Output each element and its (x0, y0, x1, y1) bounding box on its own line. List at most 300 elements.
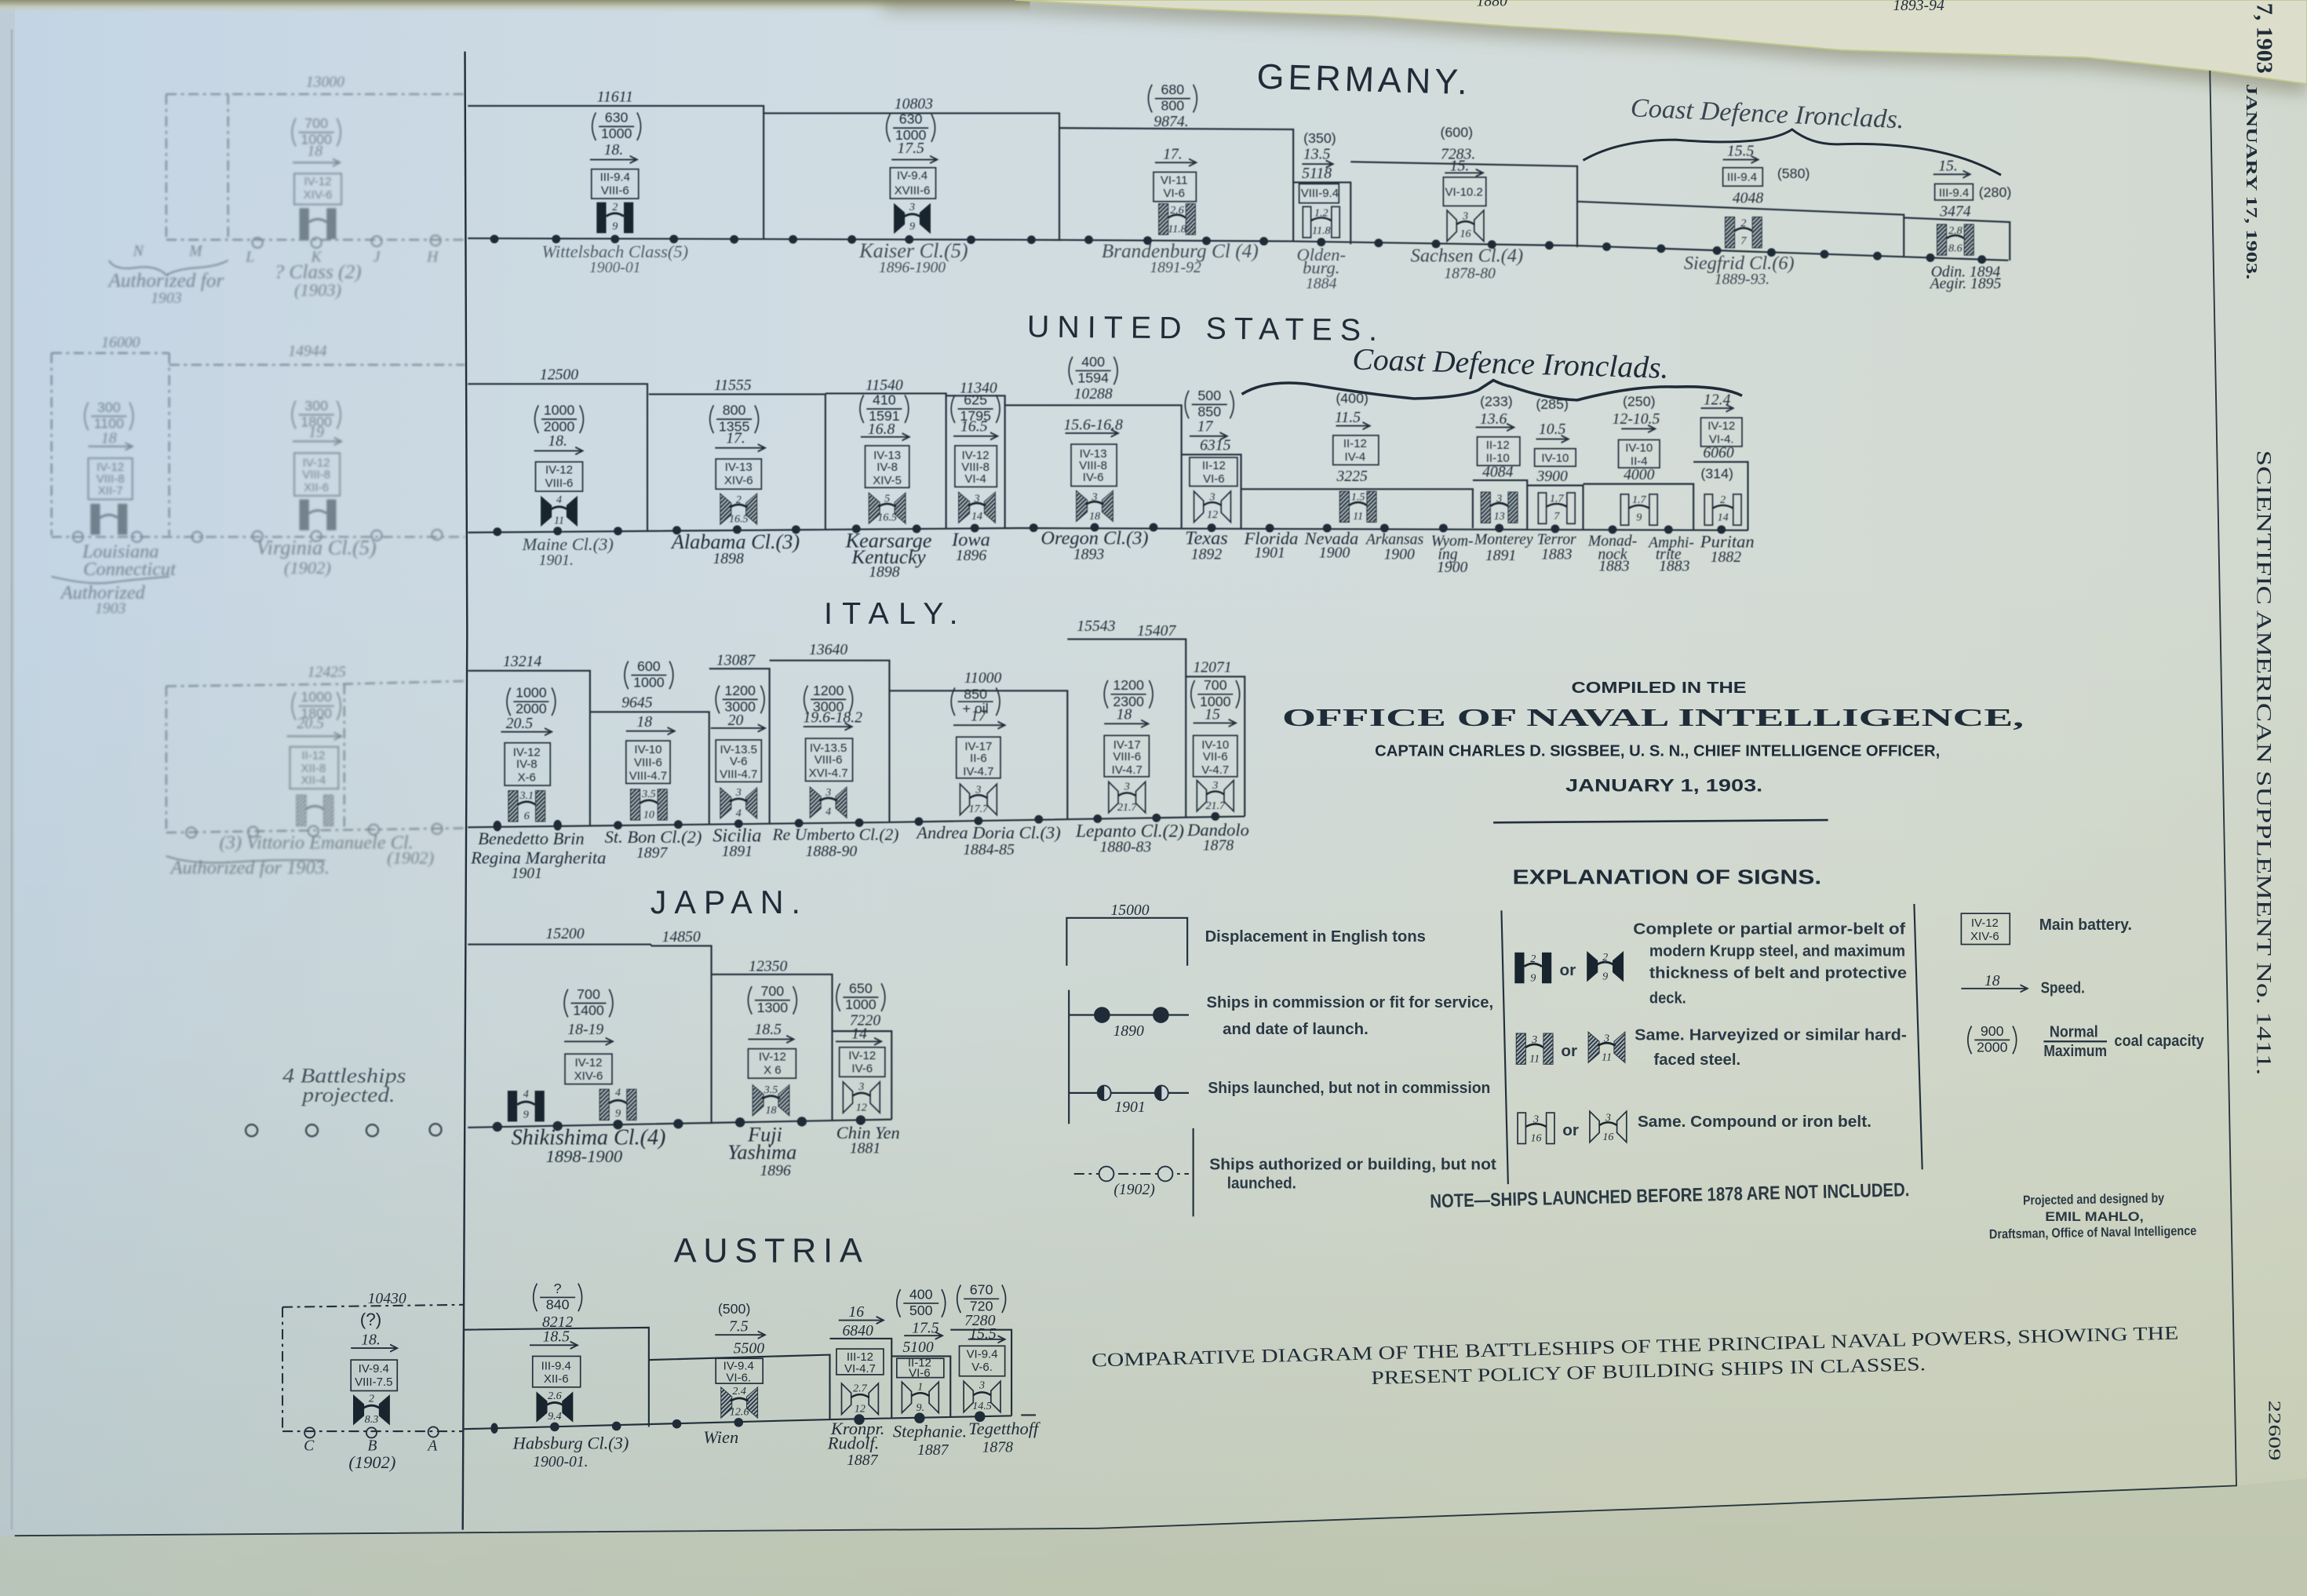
ship: Lepanto (1075, 618, 1184, 855)
ships: Monadnock and Amphitrite: (250) (1623, 393, 1656, 409)
ship: Iowa (951, 380, 1000, 564)
sign: ships in commission: Ships in commission or fit for service, (1206, 993, 1493, 1011)
japan ship dots (493, 1115, 866, 1131)
japan projected ships: 4 Battleships (282, 1065, 406, 1088)
ship: Oldenburg: (350) (1303, 130, 1336, 146)
sign: coal capacity: coal capacity (2114, 1032, 2204, 1050)
ship: Stephanie: 400 (909, 1286, 933, 1302)
ship: Dandolo: 700 (1204, 677, 1227, 693)
ship: St. Bon: 9645 (621, 694, 653, 712)
germany building ships (ghost): M (188, 242, 203, 260)
ship: Fuji and Yashima: 18.5 (755, 1021, 782, 1038)
heading: Austria: AUSTRIA (674, 1232, 862, 1270)
ship: Stephanie: 9. (917, 1401, 924, 1414)
Austria chart (282, 1281, 1041, 1472)
ship: Texas: VI-6 (1203, 472, 1225, 486)
us displacement outline (468, 384, 1748, 533)
ship: Monterey: 13 (1494, 510, 1505, 523)
Germany chart (107, 74, 2011, 307)
ship: Kronprinz Rudolf (827, 1303, 884, 1469)
United States chart (52, 333, 1755, 618)
ship: Oregon: IV-13 (1080, 447, 1107, 461)
us building ships (ghost): Connecticut (83, 559, 177, 580)
Japan chart (246, 925, 900, 1179)
ship: Terror: 10.5 (1539, 421, 1565, 438)
ships: Florida class monitors (1244, 391, 1474, 576)
sign: Harveyized armor: faced steel. (1653, 1051, 1740, 1069)
ship: Texas: Texas (1185, 528, 1228, 549)
ship: Lepanto: 15543 (1077, 618, 1116, 635)
sign: Harveyized armor: 11 (1602, 1051, 1612, 1064)
ship: St. Bon: VIII-4.7 (629, 770, 667, 783)
sign: compound armor: 16 (1530, 1132, 1542, 1145)
ship: Kaiser: 17.5 (897, 140, 924, 157)
ship: Oregon (1041, 354, 1149, 563)
ship: Oldenburg: 11.8 (1312, 224, 1331, 237)
brace: US coast defence ironclads: Coast Defence Ironclads. (1352, 342, 1669, 385)
ship: Re Umberto: 1200 (813, 683, 844, 698)
ship: Oldenburg: VIII-9.4 (1301, 187, 1339, 200)
ship: Terror: 3900 (1536, 468, 1568, 485)
sign: speed: 18 (1984, 972, 2000, 989)
sign: displacement: 15000 (1110, 902, 1150, 919)
us building ships (ghost): 18 (101, 429, 117, 446)
ship: Benedetto Brin: 3.1 (519, 789, 534, 802)
austria building ships: VIII-7.5 (355, 1376, 392, 1389)
ships: Florida class monitors: 1900 (1437, 559, 1467, 576)
ship: Texas: 850 (1197, 404, 1221, 420)
ship: Kaiser: 1000 (895, 127, 927, 143)
austria building ships: 18. (361, 1331, 381, 1348)
sign: compound armor: or (1562, 1121, 1579, 1139)
ship: Sicilia: 4 (736, 807, 742, 819)
ship: Sicilia: 1891 (722, 843, 753, 860)
ship: Maine: Maine Cl.(3) (522, 534, 614, 554)
heading: Germany: GERMANY. (1256, 56, 1467, 102)
ship: Sachsen: 15. (1450, 157, 1469, 174)
sign: coal capacity: Maximum (2043, 1042, 2107, 1060)
ships: Florida class monitors: 1901 (1254, 544, 1285, 561)
italy building ships (ghost): (3) Vittorio Emanuele Cl. (220, 833, 414, 854)
ships: Florida class monitors: Arkansas (1365, 531, 1423, 548)
ship: Shikishima (508, 925, 701, 1166)
japan displacement outline (468, 945, 891, 1128)
ship: Oregon: 18 (1089, 510, 1100, 523)
ship: Fuji and Yashima: 1300 (757, 1000, 788, 1015)
ship: Oldenburg: burg. (1303, 258, 1339, 278)
title block: Office of Naval Intelligence (1282, 679, 2024, 822)
ship: Chin Yen: Chin Yen (836, 1123, 900, 1142)
italy building ships (ghost): 12425 (308, 663, 346, 680)
italy building ships (ghost): 1800 (301, 705, 332, 721)
ship: Benedetto Brin: 1000 (516, 685, 547, 701)
ship: Stephanie (893, 1286, 967, 1459)
germany displacement outline (468, 106, 2010, 261)
ship: Wittelsbach: 630 (605, 110, 629, 126)
ship: Dandolo: 3 (1212, 779, 1218, 792)
ship: Lepanto: 15407 (1137, 622, 1177, 639)
sign: Krupp armor: 9 (1530, 971, 1536, 984)
ship: Alabama: XIV-6 (724, 474, 753, 487)
ships: Monadnock and Amphitrite: trite (1656, 545, 1682, 563)
ship: Monterey: 1891 (1485, 547, 1516, 564)
ship: Maine: 4 (556, 494, 562, 506)
ship: Habsburg: ? (554, 1281, 562, 1296)
ship: Puritan: 6060 (1703, 444, 1734, 461)
ship: Wittelsbach: 11611 (597, 88, 633, 105)
ship: Oldenburg: 5118 (1302, 165, 1332, 182)
sign: ships authorized: (1902) (1113, 1181, 1155, 1198)
ship: Brandenburg: 1891-92 (1150, 259, 1201, 276)
ship: Kearsarge and Kentucky: 410 (873, 392, 896, 408)
sign: ships authorized: launched. (1227, 1175, 1296, 1193)
ship: Habsburg: 9.4 (548, 1410, 562, 1423)
ship: Wien: Wien (703, 1427, 738, 1447)
germany building ships (ghost): H (426, 249, 439, 266)
main vertical axis (463, 52, 467, 1530)
ship: Kearsarge and Kentucky: 5 (884, 492, 890, 505)
ship: Puritan: 14 (1718, 512, 1729, 524)
us building ships (ghost): IV-12 (97, 461, 124, 474)
ship: Puritan (1700, 392, 1755, 566)
us building ships (ghost): IV-12 (303, 456, 330, 469)
ship: Kearsarge and Kentucky: Kentucky (851, 546, 926, 568)
ship: Andrea Doria: 17 (971, 708, 987, 725)
ship: Sicilia: V-6 (730, 755, 748, 768)
ship: Habsburg (512, 1281, 629, 1470)
ship: Texas: 6315 (1200, 437, 1231, 454)
ship: Maine: IV-12 (545, 464, 573, 477)
ship: Texas: 3 (1208, 490, 1215, 503)
ship: Monterey: 3 (1496, 492, 1502, 505)
ship: Oregon: Oregon Cl.(3) (1041, 528, 1149, 549)
italy building ships (ghost): 20.5 (297, 715, 324, 732)
ships: Monadnock and Amphitrite: II-4 (1631, 454, 1648, 468)
sign: compound armor: 16 (1602, 1131, 1613, 1143)
sign: main battery (1961, 913, 2132, 945)
ship: Odin and Aegir: (280) (1979, 184, 2011, 200)
ship: Texas: 1892 (1191, 545, 1222, 563)
ship: Tegetthoff: 720 (970, 1298, 993, 1314)
ship: Puritan: Puritan (1700, 531, 1755, 551)
brace: Germany coast defence ironclads: Coast Defence Ironclads. (1630, 93, 1904, 134)
japan projected ships: projected. (301, 1084, 395, 1106)
ship: Oregon: 1594 (1077, 370, 1109, 385)
ship: Kearsarge and Kentucky: Kearsarge (845, 529, 932, 552)
ship: Tegetthoff: VI-9.4 (967, 1347, 998, 1361)
ship: Siegfrid: 4048 (1733, 190, 1763, 207)
credit: Emil Mahlo: Projected and designed by (2023, 1190, 2165, 1208)
credit: Emil Mahlo (1989, 1190, 2196, 1241)
ship: Chin Yen: 7220 (850, 1012, 880, 1029)
ship: Terror: (285) (1536, 396, 1569, 412)
ship: Dandolo: 1000 (1200, 694, 1231, 709)
ships: Monadnock and Amphitrite: Monad- (1587, 532, 1637, 549)
austria displacement outline (464, 1328, 1011, 1429)
sign: ships launched: 1901 (1114, 1099, 1146, 1116)
ship: Texas: II-12 (1202, 459, 1226, 472)
ship: Maine: 1901. (539, 552, 574, 569)
ships: Monadnock and Amphitrite: 12-10.5 (1613, 410, 1660, 428)
sign: Krupp armor: 2 (1530, 953, 1536, 965)
ship: Andrea Doria: + oil (963, 701, 989, 716)
ship: Lepanto: IV-17 (1113, 738, 1141, 752)
ship: Texas: 17 (1197, 417, 1214, 435)
ship: Oregon: VIII-8 (1079, 459, 1107, 472)
ships: Florida class monitors: IV-4 (1345, 450, 1365, 464)
ship: Tegetthoff: 3 (979, 1379, 985, 1392)
ship: Kronprinz Rudolf: Kronpr. (830, 1419, 884, 1438)
ship: St. Bon: 3.5 (641, 788, 656, 800)
ship: Brandenburg: 680 (1161, 82, 1184, 97)
ship: Terror (1535, 396, 1576, 563)
sign: compound armor (1518, 1111, 1871, 1145)
ship: Texas (1185, 388, 1237, 563)
ship: Alabama: Alabama Cl.(3) (670, 530, 800, 553)
ship: Kronprinz Rudolf: VI-4.7 (844, 1362, 876, 1376)
ship: Brandenburg: 11.8 (1168, 223, 1186, 235)
ship: Wien: 7.5 (729, 1318, 749, 1335)
ship: Brandenburg: Brandenburg Cl (4) (1102, 240, 1259, 262)
ship: Siegfrid: 1889-93. (1715, 271, 1769, 288)
us building ships (ghost): Authorized (60, 582, 146, 603)
margin text: volume header (2243, 3, 2284, 1461)
germany building ships (ghost): J (374, 249, 381, 266)
note: ships before 1878: NOTE—SHIPS LAUNCHED BEFORE 1878 ARE NOT INCLUDED. (1430, 1179, 1910, 1212)
ship: Re Umberto (772, 641, 898, 860)
ship: Chin Yen: 3 (858, 1080, 864, 1093)
ship: Puritan: (314) (1700, 465, 1733, 481)
ships: Florida class monitors: 11.5 (1335, 409, 1361, 426)
ship: Alabama: 2 (736, 494, 742, 506)
ship: Kaiser: 1896-1900 (879, 259, 946, 276)
ship: Maine: 12500 (540, 366, 578, 384)
ship: Fuji and Yashima: IV-12 (759, 1051, 786, 1064)
sign: ships launched (1069, 1079, 1490, 1116)
ship: Kearsarge and Kentucky: XIV-5 (873, 474, 902, 487)
margin text: volume header: 22609 (2265, 1401, 2284, 1461)
sign: main battery: Main battery. (2039, 916, 2132, 934)
ship: Oldenburg: 1884 (1306, 275, 1337, 292)
ship: Kearsarge and Kentucky: 11540 (866, 377, 903, 394)
italy displacement outline (468, 639, 1245, 827)
italy building ships (ghost) (166, 663, 465, 879)
ship: Dandolo: 21.7 (1205, 800, 1226, 812)
ship: St. Bon: 600 (637, 658, 661, 674)
ships: Monadnock and Amphitrite: 1883 (1659, 557, 1690, 574)
ships: Florida class monitors: 11 (1353, 510, 1363, 523)
germany building ships (ghost): 13000 (306, 74, 344, 91)
ship: Tegetthoff: 670 (970, 1282, 993, 1298)
ship: Brandenburg: 9874. (1154, 113, 1189, 130)
ship: Shikishima: 4 (615, 1087, 621, 1099)
germany building ships (ghost): K (311, 249, 323, 266)
ship: Wien: 12.6 (730, 1405, 749, 1418)
us building ships (ghost): 14944 (288, 343, 327, 360)
ship: Wittelsbach: Wittelsbach Class(5) (541, 242, 688, 261)
germany building ships (ghost): 18 (307, 143, 323, 160)
ship: Odin and Aegir: 8.6 (1948, 242, 1963, 255)
ship: Iowa: 3 (973, 492, 980, 505)
ship: Fuji and Yashima (727, 957, 796, 1179)
ship: Fuji and Yashima: 12350 (749, 957, 788, 975)
ship: Sicilia: 1200 (724, 683, 756, 698)
us building ships (ghost): XII-6 (304, 481, 329, 494)
ship: Sicilia: VIII-4.7 (720, 768, 757, 782)
ship: Andrea Doria: IV-4.7 (963, 765, 993, 778)
ship: Maine (522, 366, 614, 569)
ship: Iowa: 16.5 (960, 417, 988, 435)
sign: Harveyized armor: 11 (1529, 1053, 1540, 1066)
ship: Brandenburg: VI-11 (1161, 173, 1188, 187)
ships: Monadnock and Amphitrite: 4000 (1624, 466, 1655, 483)
ship: Iowa: 14 (971, 510, 982, 523)
ship: Lepanto: Lepanto Cl.(2) (1075, 822, 1184, 842)
ship: Kaiser: 10803 (895, 96, 933, 113)
ship: Kearsarge and Kentucky: 16.8 (868, 421, 895, 438)
germany building ships (ghost): Authorized for (107, 270, 224, 292)
ship: Sachsen: 1878-80 (1444, 264, 1496, 282)
ship: Andrea Doria: Andrea Doria Cl.(3) (915, 823, 1061, 843)
ship: Shikishima: 14850 (662, 928, 701, 946)
ship: Wittelsbach: 1900-01 (589, 259, 641, 276)
ship: Siegfrid: 7 (1740, 235, 1747, 247)
ship: Wittelsbach: III-9.4 (600, 171, 630, 184)
ship: St. Bon: IV-10 (634, 743, 661, 756)
ship: Wien: (500) (718, 1301, 750, 1317)
us building ships (ghost): Louisiana (82, 541, 159, 562)
ship: Kaiser: XVIII-6 (895, 184, 930, 197)
ship: Stephanie: 5100 (902, 1339, 934, 1356)
us building ships (ghost): 300 (304, 398, 328, 414)
ship: Shikishima: 1898-1900 (546, 1146, 622, 1166)
sign: coal capacity: Normal (2050, 1023, 2098, 1041)
ship: Stephanie: 17.5 (912, 1319, 939, 1336)
ship: Lepanto: 3 (1124, 781, 1130, 793)
ship: Re Umberto: 13640 (809, 641, 847, 658)
us ship dots (493, 523, 1726, 536)
caption: comparative diagram (1092, 1323, 2179, 1389)
ship: Odin and Aegir: 2.8 (1948, 224, 1963, 237)
ship: Benedetto Brin: 20.5 (506, 715, 533, 732)
title block: Office of Naval Intelligence: OFFICE OF NAVAL INTELLIGENCE, (1282, 704, 2024, 731)
ship: Oregon: 10288 (1074, 385, 1113, 403)
sign: Krupp armor: Complete or partial armor-belt of (1633, 920, 1905, 938)
ship: Odin and Aegir: 15. (1938, 157, 1958, 174)
sign: compound armor: Same. Compound or iron belt. (1638, 1113, 1871, 1131)
ship: Brandenburg: 2.6 (1170, 204, 1184, 217)
ship: Habsburg: XII-6 (544, 1372, 569, 1386)
heading: United States: UNITED STATES. (1027, 309, 1377, 348)
ship: Alabama: IV-13 (725, 461, 753, 474)
ship: Benedetto Brin: 1901 (512, 865, 542, 882)
ships: Monadnock and Amphitrite: 9 (1636, 512, 1642, 524)
austria building ships: 8.3 (365, 1413, 378, 1426)
ship: Wittelsbach (541, 88, 688, 276)
overlapping top page (883, 0, 2307, 94)
japan projected ships (246, 1065, 441, 1136)
sign: main battery: IV-12 (1971, 916, 1999, 930)
ship: Re Umberto: XVI-4.7 (809, 767, 848, 780)
ship: Iowa: 11340 (960, 380, 997, 397)
ship: Andrea Doria: 17.7 (969, 803, 989, 815)
ship: Chin Yen: IV-6 (851, 1062, 873, 1076)
ship: Tegetthoff: 1878 (982, 1438, 1013, 1456)
ship: St. Bon: VIII-6 (634, 756, 662, 770)
sign: displacement: Displacement in English tons (1205, 927, 1426, 946)
ship: Tegetthoff: 14.5 (972, 1400, 992, 1412)
sign: speed: Speed. (2041, 978, 2085, 997)
ship: Kronprinz Rudolf: 6840 (842, 1322, 873, 1339)
Italy chart (166, 618, 1249, 882)
ship: Oldenburg: Olden- (1297, 245, 1346, 264)
ships: Florida class monitors: ing (1438, 545, 1458, 563)
ship: Sachsen: VI-10.2 (1445, 185, 1483, 199)
sign: Krupp armor: or (1560, 961, 1576, 979)
ship: Shikishima: 4 (523, 1088, 529, 1100)
austria building ships: B (367, 1437, 377, 1454)
ship: Chin Yen: 14 (851, 1026, 867, 1043)
brace: Germany coast defence ironclads (1584, 93, 2001, 175)
ship: Stephanie: 500 (909, 1303, 933, 1318)
ship: Chin Yen (836, 980, 900, 1157)
us building ships (ghost): Virginia Cl.(5) (257, 537, 377, 559)
ship: St. Bon: 18 (636, 713, 652, 731)
us building ships (ghost): 19 (308, 424, 324, 441)
ship: Sicilia: IV-13.5 (720, 743, 757, 756)
germany building ships (ghost) (107, 74, 465, 307)
ship: Habsburg: 1900-01. (533, 1453, 589, 1470)
sign: Krupp armor: modern Krupp steel, and maximum (1649, 942, 1905, 960)
germany building ships (ghost): XIV-6 (304, 188, 332, 202)
brace: US coast defence ironclads (1241, 342, 1742, 400)
ship: Kearsarge and Kentucky: 16.5 (877, 512, 897, 524)
ship: Wittelsbach: 18. (604, 141, 623, 159)
ship: Lepanto: IV-4.7 (1112, 763, 1143, 777)
ship: Sachsen: 16 (1460, 228, 1471, 240)
ship: Shikishima: 9 (523, 1109, 529, 1121)
ship: Terror: IV-10 (1541, 452, 1569, 465)
ship: Kearsarge and Kentucky: 1591 (869, 408, 900, 424)
italy building ships (ghost): 1000 (301, 689, 332, 705)
ships: Florida class monitors: Florida (1244, 529, 1298, 548)
ship: Stephanie: II-12 (908, 1357, 931, 1370)
ship: Puritan: 1882 (1711, 548, 1741, 566)
ship: Oregon: 400 (1081, 354, 1105, 370)
ship: Oldenburg (1297, 130, 1346, 292)
ship: Shikishima: 15200 (545, 925, 585, 942)
ship: Chin Yen: 12 (856, 1101, 867, 1113)
title block: Office of Naval Intelligence: CAPTAIN CHARLES D. SIGSBEE, U. S. N., CHIEF INTELLIGENCE OFFICER, (1375, 742, 1940, 760)
ship: Re Umberto: Re Umberto Cl.(2) (772, 825, 898, 844)
germany building ships (ghost): 700 (304, 115, 328, 131)
ship: Wittelsbach: 9 (612, 220, 618, 232)
ship: Monterey: 4084 (1482, 463, 1514, 480)
ship: Kronprinz Rudolf: 16 (848, 1303, 864, 1321)
ship: Texas: 12 (1207, 508, 1218, 521)
ships: Florida class monitors: Wyom- (1431, 532, 1474, 549)
sign: compound armor: 3 (1605, 1111, 1611, 1124)
ship: Monterey (1474, 393, 1533, 564)
ship: Chin Yen: IV-12 (848, 1049, 876, 1062)
germany building ships (ghost): L (245, 249, 254, 266)
ship: Sicilia: Sicilia (713, 825, 762, 846)
sign: Harveyized armor: or (1561, 1042, 1577, 1060)
ship: Andrea Doria: 1884-85 (963, 841, 1015, 858)
ship: Dandolo: VII-6 (1203, 750, 1228, 763)
ship: Sicilia: 13087 (716, 651, 756, 669)
ship: Kronprinz Rudolf: 2.7 (853, 1382, 868, 1394)
